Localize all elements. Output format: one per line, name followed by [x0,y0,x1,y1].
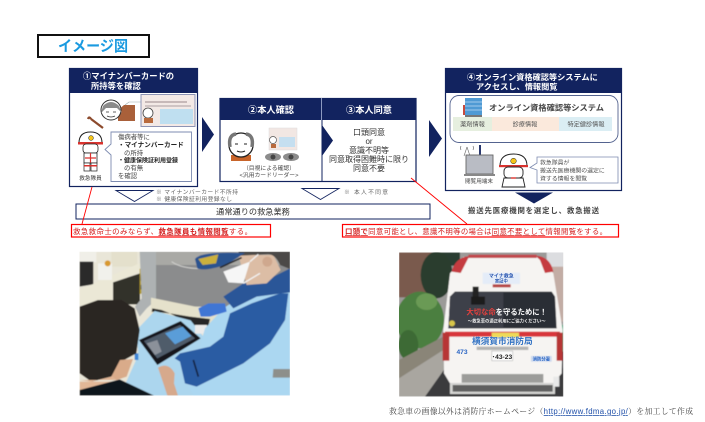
arrow: step 3 to step 4 [429,120,442,157]
step 1 header: ①マイナンバーカードの [83,71,174,81]
verification caption [240,164,299,179]
panel: step 2 and 3 [220,98,416,182]
header: identity and consent: ③本人同意 [346,104,392,115]
consent text [329,127,409,173]
officer [202,292,290,396]
data labels [453,117,612,131]
icon: viewing terminal: 閲覧用端末 [465,177,493,185]
callout: paramedic browses information [530,157,618,183]
data labels: 特定健診情報 [567,120,605,128]
head [238,255,281,285]
callout: paramedic browses information: 搬送先医療機関の選定に [540,166,605,174]
callout: right red note: 口頭で同意可能とし、意識不明等の場合は同意不要として情報閲覧をする。 [345,227,607,236]
normal operations bar [76,204,430,219]
connector line right [411,178,467,224]
cabinets [80,252,96,262]
note: no card [156,188,238,203]
wall [156,252,280,266]
data labels: 薬剤情報 [460,120,486,128]
step 4 header: ④オンライン資格確認等システムに [467,72,598,82]
online system box: オンライン資格確認等システム [489,102,604,112]
verification caption: （目視による確認） [243,164,295,172]
stripe and lights [445,332,560,337]
step 1 header [69,68,198,93]
icon: my number card [141,94,195,126]
tablet [139,321,201,365]
callout: items to confirm: の有無 [124,163,144,172]
callout: paramedic browses information: 資する情報を閲覧 [540,174,587,182]
arrow: no consent, hollow [302,188,339,200]
consent text: 口頭同意 [353,127,385,137]
callout: right red note [342,224,618,237]
icon: paramedic with arms crossed [499,154,528,187]
consent text: 同意不要 [353,163,385,173]
callout: items to confirm: を確認 [118,171,138,180]
body [443,257,563,383]
panel: step 4 online system [445,68,622,190]
icon: viewing terminal [460,145,495,185]
online system box [450,96,618,142]
photo: ambulance rear view: 消防分署 [533,355,551,362]
note: no card: ※ 健康保険証利用登録なし [156,195,232,203]
text: select hospital and transport: 搬送先医療機関を選定し、救急搬送 [468,206,600,215]
note: no consent: ※ 本人不同意 [344,188,388,196]
consent text: 同意取得困難時に限り [329,154,409,164]
photo: paramedic showing tablet to patient [79,252,290,396]
header: identity and consent [220,98,416,120]
header: identity and consent: ②本人確認 [248,104,295,115]
step 4 header: アクセスし、情報閲覧 [476,82,557,92]
callout: items to confirm: の所持 [124,148,144,157]
note: no card: ※ マイナンバーカード不所持 [156,188,238,196]
bed rail [150,297,216,322]
arrow: down to transport [515,192,553,204]
icon: elderly patient lying [88,100,141,128]
callout: left red note [72,224,270,237]
consent text: or [365,137,373,146]
normal operations bar: 通常通りの救急業務 [216,206,290,216]
photo: ambulance rear view: 横須賀市消防局 [472,335,533,346]
callout: items to confirm [105,132,192,182]
arrow: inner step 2 to 3 [322,125,333,156]
window [448,292,557,328]
data labels: 診療情報 [513,120,538,128]
photo: ambulance rear view: 大切な命を守るために！ [466,307,547,316]
icon: small card and eyes [265,128,299,161]
icon: paramedic: 救急隊員 [79,174,102,182]
icon: elderly face [229,133,253,161]
callout: items to confirm: 傷病者等に [118,132,150,141]
verification caption: <汎用カードリーダー> [240,171,299,179]
callout: paramedic browses information: 救急隊員が [540,158,570,166]
photo: ambulance rear view: 実証中 [495,278,508,285]
connector line left [82,187,92,224]
arrow: step 1 to step 2 [202,117,214,152]
title [38,35,149,57]
callout: items to confirm: ・健康保険証利用登録 [118,156,178,164]
photo: ambulance rear view: 〜救急車の適正利用にご協力ください〜 [468,317,546,324]
step 4 header [445,68,622,93]
photo: ambulance rear view: マイナ救急 [489,273,514,280]
arrow: no card, hollow [116,190,153,202]
callout: left red note: 救急救命士のみならず、救急隊員も情報閲覧する。 [73,227,252,236]
source credit: 救急車の画像以外は消防庁ホームページ（http://www.fdma.go.jp/）を加工して作成 [389,406,693,416]
step 1 header: 所持等を確認 [91,81,141,91]
photo: ambulance rear view [396,252,563,397]
bumper [462,374,543,383]
icon: server building [463,98,482,117]
photo: ambulance rear view: 473 [456,349,468,356]
title: イメージ図 [58,38,128,55]
patient [80,300,140,382]
photo: ambulance rear view: ･43-23 [492,354,512,361]
panel: step 1 card check [69,68,198,186]
blanket [126,310,204,396]
callout: items to confirm: ・マイナンバーカード [118,141,184,149]
consent text: 意識不明等 [349,145,389,155]
